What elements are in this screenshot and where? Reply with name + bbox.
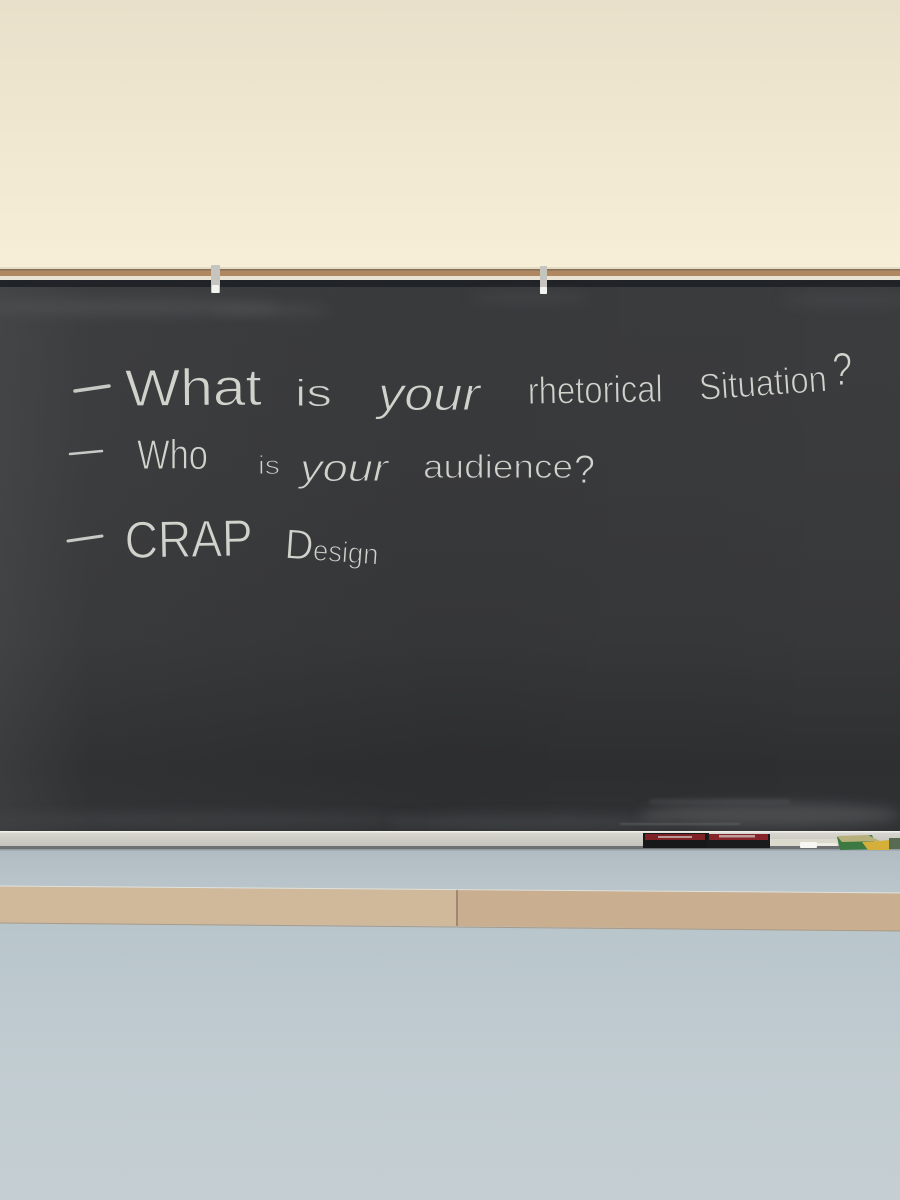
lower wall band between tray and wood strip: [0, 848, 900, 892]
chalk line 1: What is your rhetorical situation?: What: [125, 359, 263, 418]
wooden wall strip: [0, 886, 900, 931]
chalk line 2: Who is your audience?: [70, 431, 595, 492]
chalk line 1: What is your rhetorical situation?: [75, 343, 852, 420]
chalk line 3: CRAP Design: Design: [283, 520, 380, 574]
chalk line 2: Who is your audience?: Who: [137, 431, 208, 478]
chalk line 1: What is your rhetorical situation?: rhetorical: [527, 369, 663, 413]
chalk line 1: What is your rhetorical situation?: is: [295, 373, 332, 415]
chalk line 2: Who is your audience?: is: [258, 450, 280, 480]
top map rail: [0, 267, 900, 280]
chalk tray: [0, 831, 900, 850]
chalk line 2: Who is your audience?: audience: [423, 448, 573, 485]
cream upper wall: [0, 0, 900, 268]
chalk line 1: What is your rhetorical situation?: ?: [832, 343, 852, 395]
chalk line 3: CRAP Design: [68, 510, 380, 574]
chalkboard surface: [0, 280, 900, 834]
dash 2: [70, 451, 102, 454]
pieces of white chalk: [770, 839, 838, 848]
map hook: left: [211, 265, 220, 293]
dash 1: [75, 386, 109, 391]
chalk line 1: What is your rhetorical situation?: your: [375, 368, 482, 420]
chalk line 2: Who is your audience?: ?: [574, 448, 595, 492]
eraser: right: [707, 834, 770, 848]
chalk line 3: CRAP Design: CRAP: [124, 510, 253, 570]
map hook: right: [540, 266, 547, 294]
lower blue-grey wall: [0, 922, 900, 1200]
dash 3: [68, 536, 102, 541]
eraser: left: [643, 833, 709, 848]
crayon chalk box: [837, 835, 900, 850]
chalk line 2: Who is your audience?: your: [296, 448, 390, 490]
chalk line 1: What is your rhetorical situation?: Situation: [698, 358, 828, 408]
